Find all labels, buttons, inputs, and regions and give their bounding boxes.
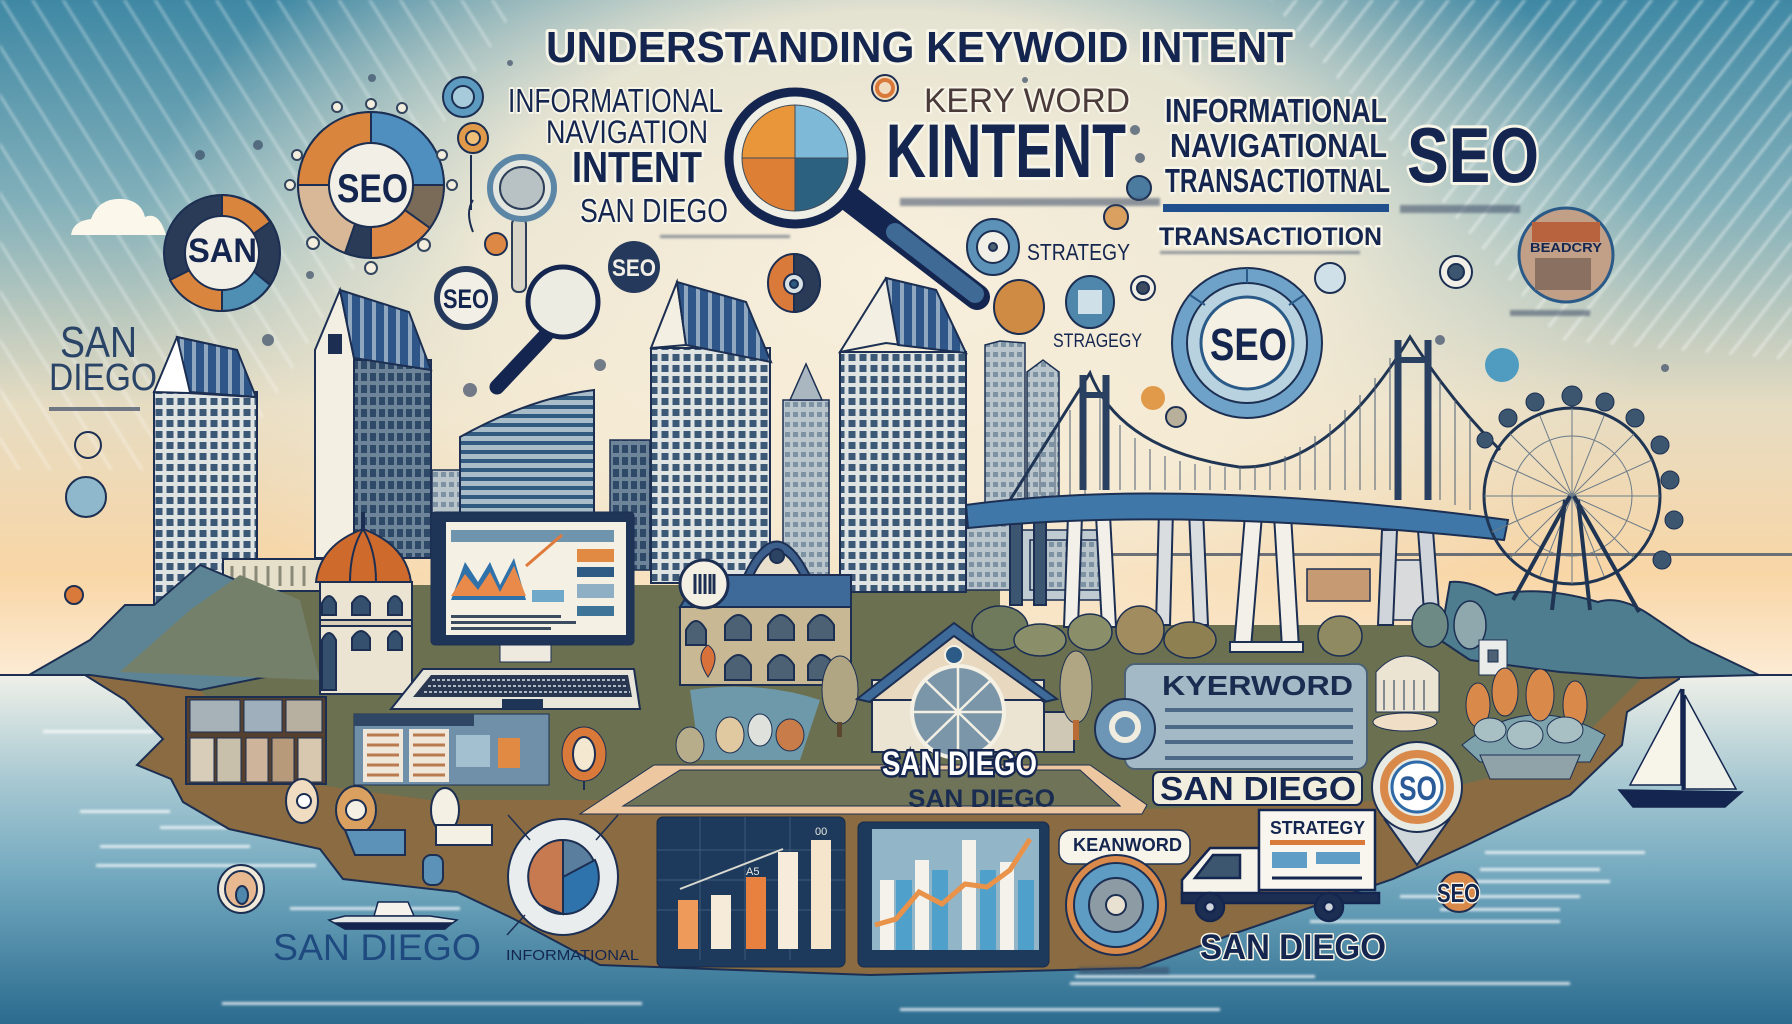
capitol dome building: [316, 512, 412, 694]
monitor stand: [500, 645, 551, 662]
bushes under bridge: [972, 601, 1486, 658]
intent list block: NAVIGATIONAL: [1170, 127, 1387, 164]
left hills: [29, 565, 300, 690]
keyboard: [391, 669, 640, 709]
SO badge pin: [1372, 742, 1462, 865]
photo grid: [186, 697, 326, 784]
screen chart: [451, 530, 614, 630]
scatter marks: [195, 60, 1669, 397]
title: UNDERSTANDING KEYWOID INTENT: [546, 23, 1293, 72]
San Diego side label: DIEGO: [49, 357, 157, 399]
bridge: deck: [966, 493, 1508, 540]
flower basket: [1462, 668, 1605, 779]
ferris wheel legs: [1513, 496, 1639, 612]
heading group: keyword intent: KERY WORD: [924, 82, 1130, 120]
SEO ring: centre: [1172, 268, 1322, 418]
building: second tower: [315, 290, 431, 558]
strategy labels: [1027, 239, 1142, 352]
building: curved glass block: [460, 390, 594, 540]
satellite dots around SEO ring: [285, 99, 457, 274]
label: San Diego on building: SAN DIEGO: [882, 745, 1037, 783]
left hills foliage: [120, 575, 320, 680]
SEO ring: centre: SEO: [1210, 319, 1287, 370]
ferris wheel: [1477, 386, 1683, 584]
background: sea: [0, 675, 1792, 1024]
bar chart: left: [657, 817, 845, 967]
sailboat: [1619, 689, 1742, 807]
station building: [857, 623, 1074, 758]
truck: [1182, 810, 1379, 921]
label: San Diego lower left: SAN DIEGO: [273, 927, 481, 968]
big magnifier with pie: [729, 92, 977, 297]
SEO small float badge: SEO: [1437, 878, 1480, 908]
label: Informational lower: INFORMATIONAL: [506, 947, 639, 964]
bridge: [966, 337, 1508, 652]
cloud: [71, 199, 166, 235]
keyword bubble: KEANWORD: [1073, 835, 1182, 855]
web panel: [354, 714, 549, 785]
strategy labels: STRAGEGY: [1053, 331, 1142, 352]
top circle icon: [872, 75, 898, 101]
keyword bubble: [1059, 830, 1190, 864]
small blurry captions: [660, 198, 1590, 974]
map badge: top right: BEADCRY: [1530, 240, 1602, 255]
San Diego side label: [49, 318, 157, 411]
scene: park and trees: [676, 645, 858, 763]
SEO badges: small: SEO: [612, 255, 656, 282]
low cream building: [223, 559, 323, 591]
SEO small float badge: [1437, 872, 1480, 912]
small icons: upper left: [65, 77, 507, 604]
truck: STRATEGY: [1270, 818, 1365, 838]
intent list block: INFORMATIONAL: [1165, 92, 1387, 129]
building: right tower: [840, 278, 966, 592]
SEO badges: small: SEO: [443, 284, 489, 314]
intent list block: TRANSACTIOTNAL: [1165, 162, 1390, 199]
ring icon on water: [218, 865, 264, 913]
intent list block: [1159, 92, 1390, 251]
badge on house: [680, 560, 728, 608]
label: San Diego on plaza: SAN DIEGO: [908, 785, 1055, 813]
SO badge pin: SO: [1399, 770, 1437, 808]
white building: [1479, 640, 1507, 675]
keyword panel: [1125, 664, 1367, 769]
heading group: left intent labels: SAN DIEGO: [580, 192, 728, 229]
monitor: [391, 512, 640, 709]
pavilion: [1373, 656, 1439, 731]
keyword panel: KYERWORD: [1162, 670, 1353, 701]
heading group: left intent labels: [508, 82, 728, 229]
bar chart: left: 00: [815, 826, 827, 838]
label: San Diego lower right: SAN DIEGO: [1200, 928, 1386, 967]
circle icons: centre right: [967, 176, 1519, 427]
label box: San Diego: SAN DIEGO: [1160, 770, 1356, 807]
SEO ring: top left: SEO: [337, 167, 408, 211]
intent list block: TRANSACTIOTION: [1159, 223, 1382, 251]
eye icon orange: [768, 254, 820, 312]
SEO badges: small: [434, 241, 660, 330]
skyline: background towers: [432, 341, 1430, 620]
dial gauge: [507, 815, 618, 935]
bridge: piers: [1010, 510, 1440, 652]
horizon line: [0, 553, 1792, 676]
magnifier handle: [851, 200, 977, 297]
right hills: [1440, 582, 1759, 678]
plaza: [580, 765, 1147, 814]
big SEO: SEO: [1407, 111, 1539, 199]
bar chart: left: A5: [746, 866, 759, 878]
San Diego side label: SAN: [60, 318, 137, 367]
building: central tower: [651, 282, 771, 583]
map badge: top right: [1519, 208, 1613, 302]
building: left tower: [154, 337, 257, 604]
heading group: left intent labels: INTENT: [572, 143, 702, 192]
orange pin icon: [562, 727, 606, 790]
pie chart: [742, 105, 848, 211]
bridge: towers and cables: [1010, 337, 1500, 510]
background: sky: [0, 0, 1792, 676]
mid-ground vegetation: [200, 585, 1640, 810]
bar chart: right: [858, 822, 1049, 967]
yacht: [329, 902, 457, 929]
search icon: [1095, 699, 1155, 759]
heading group: left intent labels: INFORMATIONAL: [508, 82, 723, 119]
magnifier: glass: [497, 267, 598, 387]
house with blue roof: [680, 542, 851, 685]
heading group: left intent labels: NAVIGATION: [546, 114, 708, 150]
heading group: keyword intent: KINTENT: [886, 109, 1126, 194]
SEO ring: top left: [298, 112, 444, 258]
orange target ring: [1066, 855, 1166, 955]
SAN ring: [164, 195, 280, 311]
SAN ring: SAN: [188, 232, 257, 270]
land mass: [85, 585, 1679, 975]
small pins on land: [286, 779, 492, 885]
magnifier: lens and handle: [490, 157, 554, 292]
strategy labels: STRATEGY: [1027, 239, 1130, 265]
tree: [1060, 651, 1092, 740]
heading group: keyword intent: [886, 82, 1130, 194]
